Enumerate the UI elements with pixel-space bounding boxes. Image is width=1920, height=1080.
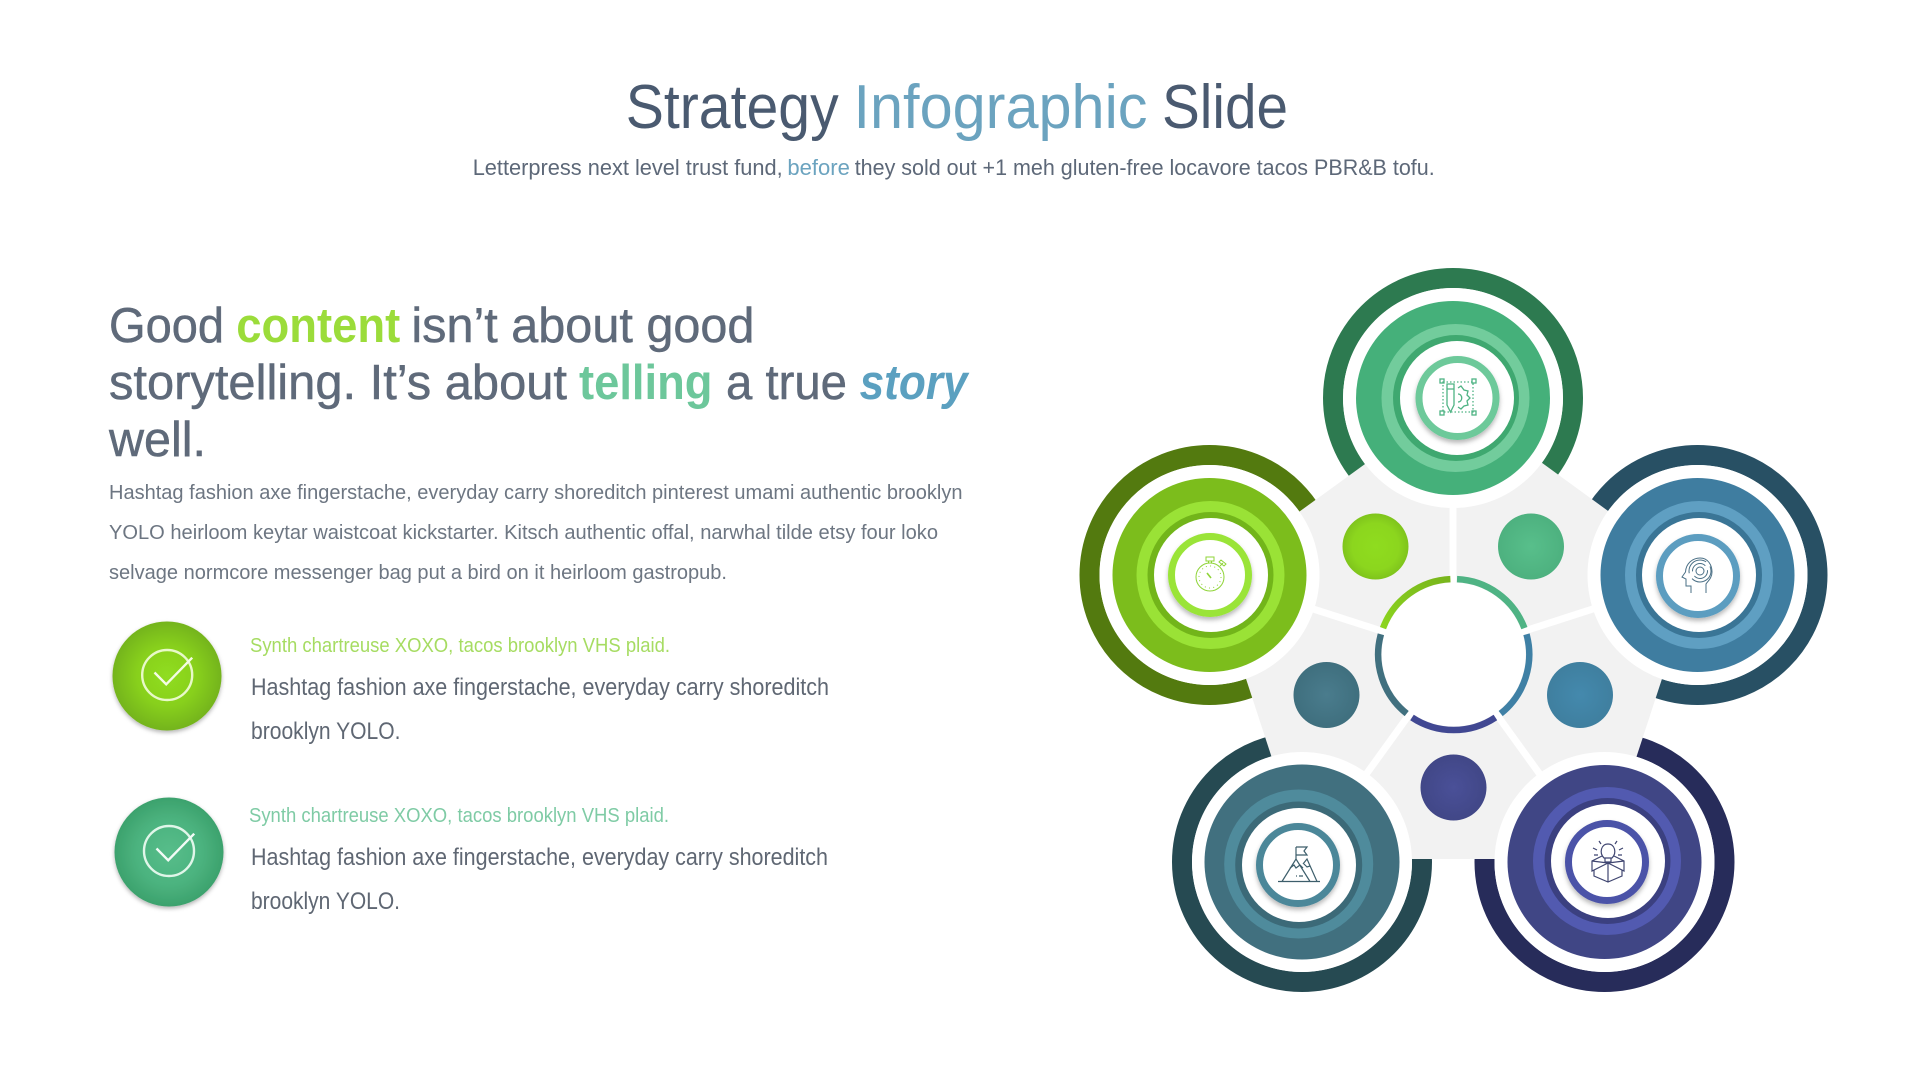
node: bottom-right indigo: [1494, 752, 1714, 972]
item 1 text: [251, 674, 829, 745]
item 1 label: Synth chartreuse XOXO, tacos brooklyn VHS plaid.: [250, 635, 670, 657]
item 1 text: brooklyn YOLO.: [251, 718, 400, 745]
icon: green check badge: [112, 622, 222, 730]
title: [626, 73, 1288, 142]
heading: telling: [579, 356, 712, 410]
body paragraph: Hashtag fashion axe fingerstache, everyday carry shoreditch pinterest umami authentic brooklyn: [109, 482, 962, 504]
heading: story: [860, 356, 970, 410]
subtitle: Letterpress next level trust fund,: [473, 155, 783, 180]
icon: stopwatch: [1196, 557, 1226, 591]
heading: a true: [726, 356, 847, 410]
outer ring arcs: [1090, 278, 1818, 982]
item 2 text: [251, 844, 828, 915]
icon: pencil and gear: [1440, 379, 1476, 415]
list item 1: [112, 622, 829, 745]
item 2 text: Hashtag fashion axe fingerstache, everyday carry shoreditch: [251, 844, 828, 871]
node: bottom-left teal: [1192, 752, 1412, 972]
pentagon diagram: [1090, 278, 1818, 982]
title: Slide: [1162, 73, 1288, 142]
icon: head with maze: [1682, 558, 1712, 593]
body paragraph: YOLO heirloom keytar waistcoat kickstarter. Kitsch authentic offal, narwhal tilde etsy four loko: [109, 522, 938, 544]
node: left lime: [1100, 465, 1320, 685]
subtitle: they sold out +1 meh gluten-free locavore tacos PBR&B tofu.: [855, 155, 1435, 180]
heading: [108, 299, 970, 467]
title: Infographic: [854, 73, 1148, 142]
icon: mountain with flag: [1278, 847, 1320, 882]
heading: Good: [109, 299, 224, 353]
body paragraph: selvage normcore messenger bag put a bird on it heirloom gastropub.: [109, 562, 727, 584]
grey pentagon with dividers: [1212, 398, 1696, 859]
subtitle: before: [787, 155, 850, 180]
item 2 text: brooklyn YOLO.: [251, 888, 400, 915]
heading: well.: [108, 413, 206, 467]
heading: isn’t about good: [411, 299, 754, 353]
item 1 text: Hashtag fashion axe fingerstache, everyday carry shoreditch: [251, 674, 829, 701]
list item 2: [114, 798, 828, 915]
body paragraph: [109, 482, 962, 584]
title: Strategy: [626, 73, 839, 142]
coloured dots: [1294, 514, 1613, 820]
node: top green: [1343, 288, 1563, 508]
icon: box with lightbulb: [1592, 841, 1624, 882]
heading: content: [236, 299, 400, 353]
icon: teal check badge: [114, 798, 224, 906]
item 2 label: Synth chartreuse XOXO, tacos brooklyn VHS plaid.: [249, 805, 669, 827]
node: right blue: [1588, 465, 1808, 685]
heading: storytelling. It’s about: [109, 356, 567, 410]
centre circle with arc segments: [1378, 579, 1529, 730]
subtitle: [473, 155, 1435, 180]
